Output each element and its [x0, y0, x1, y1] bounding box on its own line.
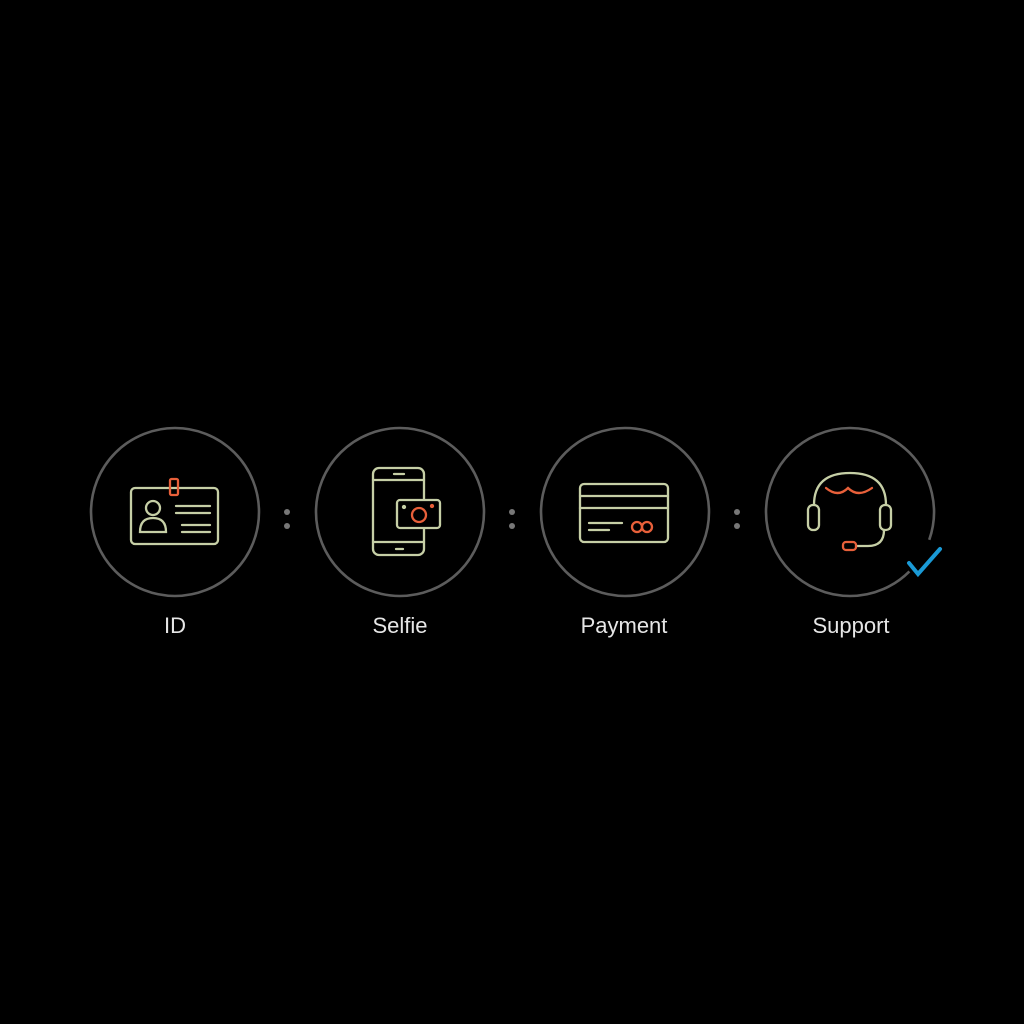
- circle: Support (with gap): [731, 393, 969, 631]
- step: Payment: [541, 428, 709, 638]
- separator dots 3: [734, 509, 740, 529]
- separator dots 2: [509, 509, 515, 529]
- step: ID: [91, 428, 259, 638]
- label: Payment: Payment: [581, 613, 667, 638]
- label: ID: ID: [164, 613, 186, 638]
- circle: Selfie: [316, 428, 484, 596]
- icon: check mark: [909, 549, 940, 574]
- step: Support: [731, 393, 969, 638]
- label: Support: Support: [812, 613, 890, 638]
- icon: ID card: [131, 479, 218, 544]
- circle: Payment: [541, 428, 709, 596]
- step: Selfie: [316, 428, 484, 638]
- icon: headset: [808, 473, 891, 550]
- icon: phone with camera: [373, 468, 440, 555]
- separator dots 1: [284, 509, 290, 529]
- icon: credit card: [580, 484, 668, 542]
- circle: ID: [91, 428, 259, 596]
- label: Selfie: Selfie: [372, 613, 428, 638]
